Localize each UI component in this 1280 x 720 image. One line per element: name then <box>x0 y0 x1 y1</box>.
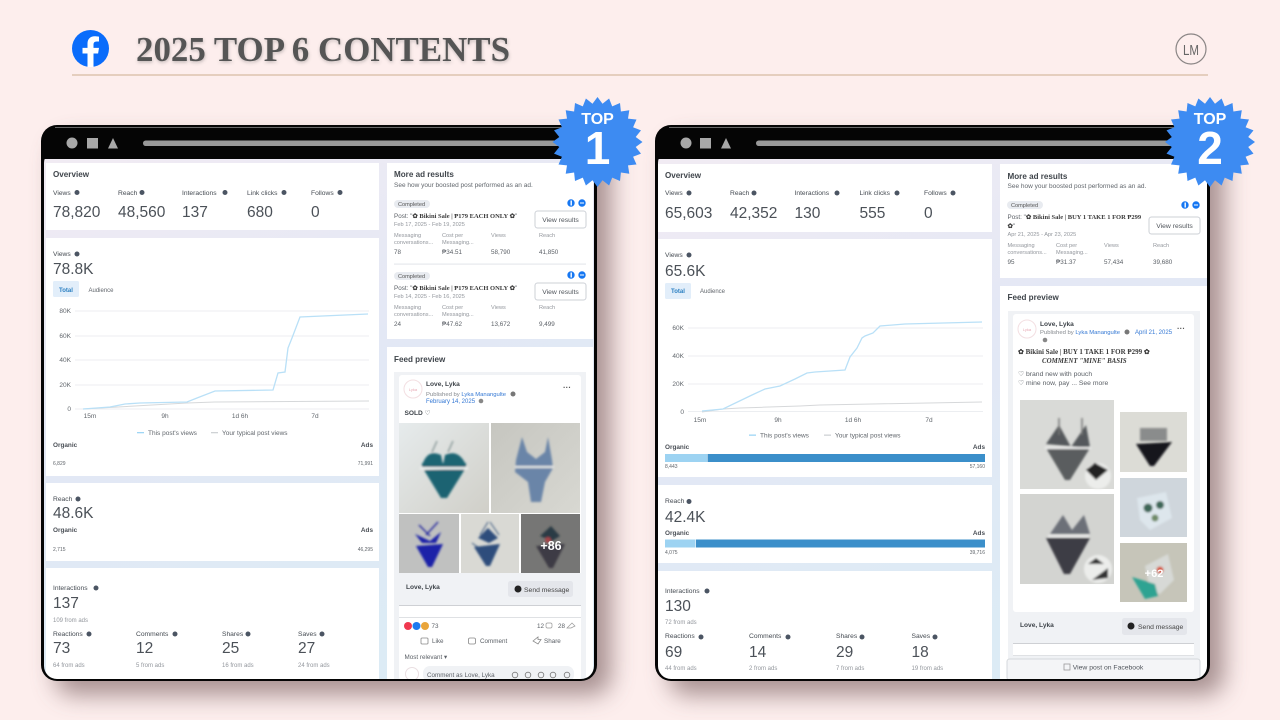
ad result 2: Messaging... <box>442 312 474 318</box>
card: overview <box>46 163 379 230</box>
line chart: 0 <box>67 406 71 413</box>
post header: Lyka <box>409 387 418 392</box>
line chart: 40K <box>59 357 72 364</box>
card: interactions <box>46 568 379 680</box>
card: overview: 42,352 <box>730 205 777 222</box>
card: views chart: 57,160 <box>970 464 985 470</box>
ad result 1: 41,850 <box>539 249 559 256</box>
reaction bar: 73 <box>432 623 439 630</box>
card: interactions: 44 from ads <box>665 666 697 672</box>
card: interactions: 25 <box>222 640 239 657</box>
badge: top 2: TOP <box>1194 111 1227 128</box>
title: 2025 TOP 6 CONTENTS <box>136 30 510 69</box>
device frame <box>41 125 597 681</box>
ad result 1: Post: "✿ Bikini Sale | ₱179 EACH ONLY ✿" <box>394 212 517 220</box>
card: more ad results <box>387 163 593 339</box>
ad result 1: 58,790 <box>491 249 511 256</box>
card: overview: Interactions <box>182 190 217 197</box>
card: overview: Overview <box>53 170 90 179</box>
header <box>72 30 1208 76</box>
line chart <box>59 308 369 437</box>
ad result: View results <box>1156 223 1193 230</box>
view post button <box>1007 659 1200 680</box>
post photo grid: +62 <box>1145 568 1163 580</box>
ad result: 57,434 <box>1104 259 1124 266</box>
card: overview: 0 <box>924 205 933 222</box>
card: interactions: Interactions <box>665 588 700 595</box>
ad result <box>1007 201 1200 266</box>
card: overview: 680 <box>247 204 273 221</box>
line chart: 7d <box>925 417 933 424</box>
line chart: 0 <box>680 409 684 416</box>
card: interactions: 24 from ads <box>298 663 330 669</box>
line chart: 40K <box>672 353 685 360</box>
card: views chart: Audience <box>700 289 726 295</box>
comment box: Comment as Love, Lyka <box>427 672 495 679</box>
line chart: 1d 6h <box>232 413 249 420</box>
card: interactions: 14 <box>749 644 767 661</box>
card: interactions: Comments <box>749 633 782 640</box>
ad result: Messaging <box>1008 243 1035 249</box>
ad result: Messaging... <box>1056 250 1088 256</box>
line chart: 9h <box>774 417 782 424</box>
line chart: 15m <box>694 417 706 424</box>
card: overview: 78,820 <box>53 204 101 221</box>
card: interactions: 137 <box>53 595 79 612</box>
card: views chart: Total <box>671 289 685 295</box>
card: overview: Views <box>53 190 71 197</box>
post header <box>1018 320 1185 342</box>
reaction bar: Like <box>432 638 444 645</box>
post photo grid: +86 <box>540 539 562 553</box>
card: feed preview <box>387 347 593 682</box>
card: overview: 130 <box>794 205 821 222</box>
card: reach: 39,716 <box>970 550 985 556</box>
card: overview: 137 <box>182 204 208 221</box>
card: more ad results: More ad results <box>1008 172 1068 181</box>
badge: top 1: 1 <box>585 122 610 174</box>
ad result: Reach <box>1153 243 1169 249</box>
card: overview: Overview <box>665 171 702 180</box>
ad result 1: Reach <box>539 233 555 239</box>
ad result 1: Completed <box>398 202 425 208</box>
card: more ad results: See how your boosted post performed as an ad. <box>394 182 533 189</box>
card: more ad results <box>1000 164 1208 278</box>
card: views chart: Audience <box>88 288 114 294</box>
line chart: 20K <box>672 381 685 388</box>
post header: ··· <box>563 383 571 392</box>
card: reach: Reach <box>53 496 73 503</box>
ad result 2: 9,499 <box>539 321 555 328</box>
card: interactions: 2 from ads <box>749 666 777 672</box>
ad result: 39,680 <box>1153 259 1173 266</box>
card: reach <box>658 485 992 563</box>
post footer: Love, Lyka <box>406 584 440 591</box>
card: reach: 48.6K <box>53 505 94 522</box>
post header: Love, Lyka <box>426 381 460 388</box>
card: views chart: 78.8K <box>53 261 94 278</box>
ad result 2: Post: "✿ Bikini Sale | ₱179 EACH ONLY ✿" <box>394 284 517 292</box>
line chart: Your typical post views <box>222 430 288 437</box>
card: interactions: 72 from ads <box>665 620 697 626</box>
line chart: 9h <box>161 413 169 420</box>
card: interactions: Comments <box>136 631 169 638</box>
card: views chart <box>46 238 379 476</box>
card: interactions: 18 <box>912 644 929 661</box>
card: reach: Organic <box>665 530 690 537</box>
reaction bar: 28 <box>558 623 566 630</box>
line chart: This post's views <box>148 430 198 437</box>
ad result 2: 24 <box>394 321 402 328</box>
badge: top 1 <box>552 97 642 187</box>
ad result: ₱31.37 <box>1056 259 1076 266</box>
card: interactions: 5 from ads <box>136 663 164 669</box>
ad result 1: View results <box>542 217 579 224</box>
ad result 2: Feb 14, 2025 - Feb 16, 2025 <box>394 294 465 300</box>
panel: top 1 post insights <box>41 97 642 695</box>
card: overview: Interactions <box>794 190 830 197</box>
card: overview: 555 <box>860 205 885 222</box>
reaction bar: Comment <box>480 638 508 645</box>
icon: facebook logo <box>72 30 109 67</box>
panel: top 2 post insights <box>655 97 1255 695</box>
ad result 2: ₱47.62 <box>442 321 462 328</box>
card: overview: Link clicks <box>860 190 891 197</box>
ad result 2: Cost per <box>442 305 463 311</box>
card: views chart: 6,829 <box>53 461 66 467</box>
reaction bar <box>404 622 575 661</box>
ad result: Completed <box>1011 203 1038 209</box>
ad result 2: conversations... <box>394 312 434 318</box>
badge: top 2: 2 <box>1197 122 1223 174</box>
ad result 2: Messaging <box>394 305 421 311</box>
card: overview: 48,560 <box>118 204 166 221</box>
ad result 1: conversations... <box>394 240 434 246</box>
card: overview <box>658 164 992 232</box>
card: views chart: Ads <box>361 442 373 449</box>
ad result: ✿" <box>1008 222 1015 230</box>
post header: Lyka <box>1023 327 1032 332</box>
card: overview: Follows <box>924 190 947 197</box>
card: interactions: 73 <box>53 640 70 657</box>
card: overview: 0 <box>311 204 320 221</box>
brand logo: LM <box>1183 42 1199 59</box>
card: interactions: 16 from ads <box>222 663 254 669</box>
card: interactions: 27 <box>298 640 315 657</box>
post header <box>404 380 571 417</box>
line chart: 20K <box>59 382 72 389</box>
line chart: This post's views <box>760 432 810 440</box>
card: overview: 65,603 <box>665 205 712 222</box>
ad result 2: View results <box>542 289 579 296</box>
ad result 1: Cost per <box>442 233 463 239</box>
card: interactions: 109 from ads <box>53 618 88 624</box>
card: interactions: Shares <box>222 631 244 638</box>
card: reach: 42.4K <box>665 509 706 526</box>
line chart: 1d 6h <box>845 417 862 424</box>
ad result 2: Views <box>491 305 506 311</box>
card: feed preview <box>1000 286 1208 681</box>
card: more ad results: See how your boosted post performed as an ad. <box>1008 183 1146 190</box>
card: interactions: Reactions <box>53 631 83 638</box>
post header: Published by Lyka Manangulte <box>1040 330 1121 336</box>
card: interactions: 69 <box>665 644 682 661</box>
card: reach: Ads <box>973 530 985 537</box>
card: reach: Reach <box>665 498 685 505</box>
ad result: conversations... <box>1008 250 1047 256</box>
ad result 1: Views <box>491 233 506 239</box>
ad result 1: Messaging... <box>442 240 474 246</box>
ad result: Apr 21, 2025 - Apr 23, 2025 <box>1008 232 1076 238</box>
card: interactions: Shares <box>836 633 858 640</box>
post header: Love, Lyka <box>1040 321 1074 328</box>
card: interactions: 12 <box>136 640 153 657</box>
card: overview: Views <box>665 190 683 197</box>
ad result 1 <box>394 199 586 256</box>
card: views chart: Views <box>53 251 71 258</box>
post footer: Send message <box>524 587 570 594</box>
card: reach: 2,715 <box>53 547 66 553</box>
card: interactions: Reactions <box>665 633 695 640</box>
post header: April 21, 2025 <box>1135 330 1173 336</box>
card: overview: Link clicks <box>247 190 278 197</box>
bar: organic vs ads views <box>665 454 985 462</box>
line chart: 60K <box>672 325 685 332</box>
post photo grid <box>399 423 580 573</box>
post header: Published by Lyka Manangulte <box>426 392 507 398</box>
ad result 2: 13,672 <box>491 321 511 328</box>
badge: top 2 <box>1165 97 1255 187</box>
reaction bar: 12 <box>537 623 545 630</box>
card: interactions: Saves <box>298 631 317 638</box>
card: interactions: Saves <box>912 633 931 640</box>
bar: organic vs ads reach <box>665 540 985 548</box>
card: more ad results: More ad results <box>394 170 454 179</box>
post caption: ♡ brand new with pouch <box>1018 371 1092 378</box>
comment box <box>405 666 574 679</box>
card: views chart: Views <box>665 252 683 259</box>
device frame <box>655 125 1210 681</box>
card: views chart: 71,991 <box>358 461 373 467</box>
post footer: Send message <box>1138 624 1184 631</box>
line chart: 7d <box>311 413 319 420</box>
post footer <box>399 573 581 618</box>
badge: top 1: TOP <box>581 111 614 128</box>
post header: ··· <box>1177 324 1185 333</box>
post caption: ✿ Bikini Sale | BUY 1 TAKE 1 FOR ₱299 ✿ <box>1018 348 1150 356</box>
card: interactions <box>658 571 992 681</box>
ad result: 95 <box>1008 259 1015 266</box>
card: interactions: 19 from ads <box>912 666 943 672</box>
card: reach: 46,295 <box>358 547 373 553</box>
ad result 1: Messaging <box>394 233 421 239</box>
post caption: COMMENT "MINE" BASIS <box>1042 358 1127 365</box>
card: interactions: 29 <box>836 644 853 661</box>
card: overview: Follows <box>311 190 334 197</box>
card: views chart: Organic <box>665 444 690 451</box>
card: interactions: 7 from ads <box>836 666 864 672</box>
view post button: View post on Facebook <box>1073 664 1144 672</box>
card: overview: Reach <box>730 190 750 197</box>
ad result: Views <box>1104 243 1119 249</box>
ad result 2: Reach <box>539 305 555 311</box>
card: reach: Ads <box>361 527 373 534</box>
post caption <box>1018 348 1150 387</box>
line chart <box>672 322 983 440</box>
card: reach <box>46 483 379 561</box>
post caption: ♡ mine now, pay ... See more <box>1018 380 1109 387</box>
reaction bar: Share <box>544 638 561 645</box>
card: views chart: Organic <box>53 442 78 449</box>
card: views chart: Ads <box>973 444 985 451</box>
card: reach: Organic <box>53 527 78 534</box>
line chart: Your typical post views <box>835 432 901 440</box>
card: overview: Reach <box>118 190 138 197</box>
card: views chart: 8,443 <box>665 464 678 470</box>
card: interactions: 64 from ads <box>53 663 85 669</box>
ad result 2 <box>394 271 586 328</box>
post photo grid <box>1020 400 1187 602</box>
ad result: Post: "✿ Bikini Sale | BUY 1 TAKE 1 FOR ₱299 <box>1008 213 1142 221</box>
post footer: Love, Lyka <box>1020 622 1054 629</box>
ad result 1: 78 <box>394 249 402 256</box>
post header: February 14, 2025 <box>426 399 476 405</box>
ad result 1: ₱34.51 <box>442 249 462 256</box>
ad result 1: Feb 17, 2025 - Feb 19, 2025 <box>394 222 465 228</box>
card: views chart <box>658 239 992 477</box>
line chart: 80K <box>59 308 72 315</box>
card: views chart: 65.6K <box>665 263 706 280</box>
card: feed preview: Feed preview <box>1008 293 1059 302</box>
brand logo <box>1176 34 1206 64</box>
line chart: 60K <box>59 333 72 340</box>
card: views chart: Total <box>59 288 73 294</box>
line chart: 15m <box>84 413 96 420</box>
card: reach: 4,075 <box>665 550 678 556</box>
card: feed preview: Feed preview <box>394 355 446 364</box>
ad result: Cost per <box>1056 243 1077 249</box>
post footer <box>1013 618 1194 656</box>
reaction bar: Most relevant ▾ <box>404 654 448 661</box>
card: interactions: Interactions <box>53 585 88 592</box>
post header: SOLD ♡ <box>404 410 431 417</box>
card: interactions: 130 <box>665 598 691 615</box>
ad result 2: Completed <box>398 274 425 280</box>
